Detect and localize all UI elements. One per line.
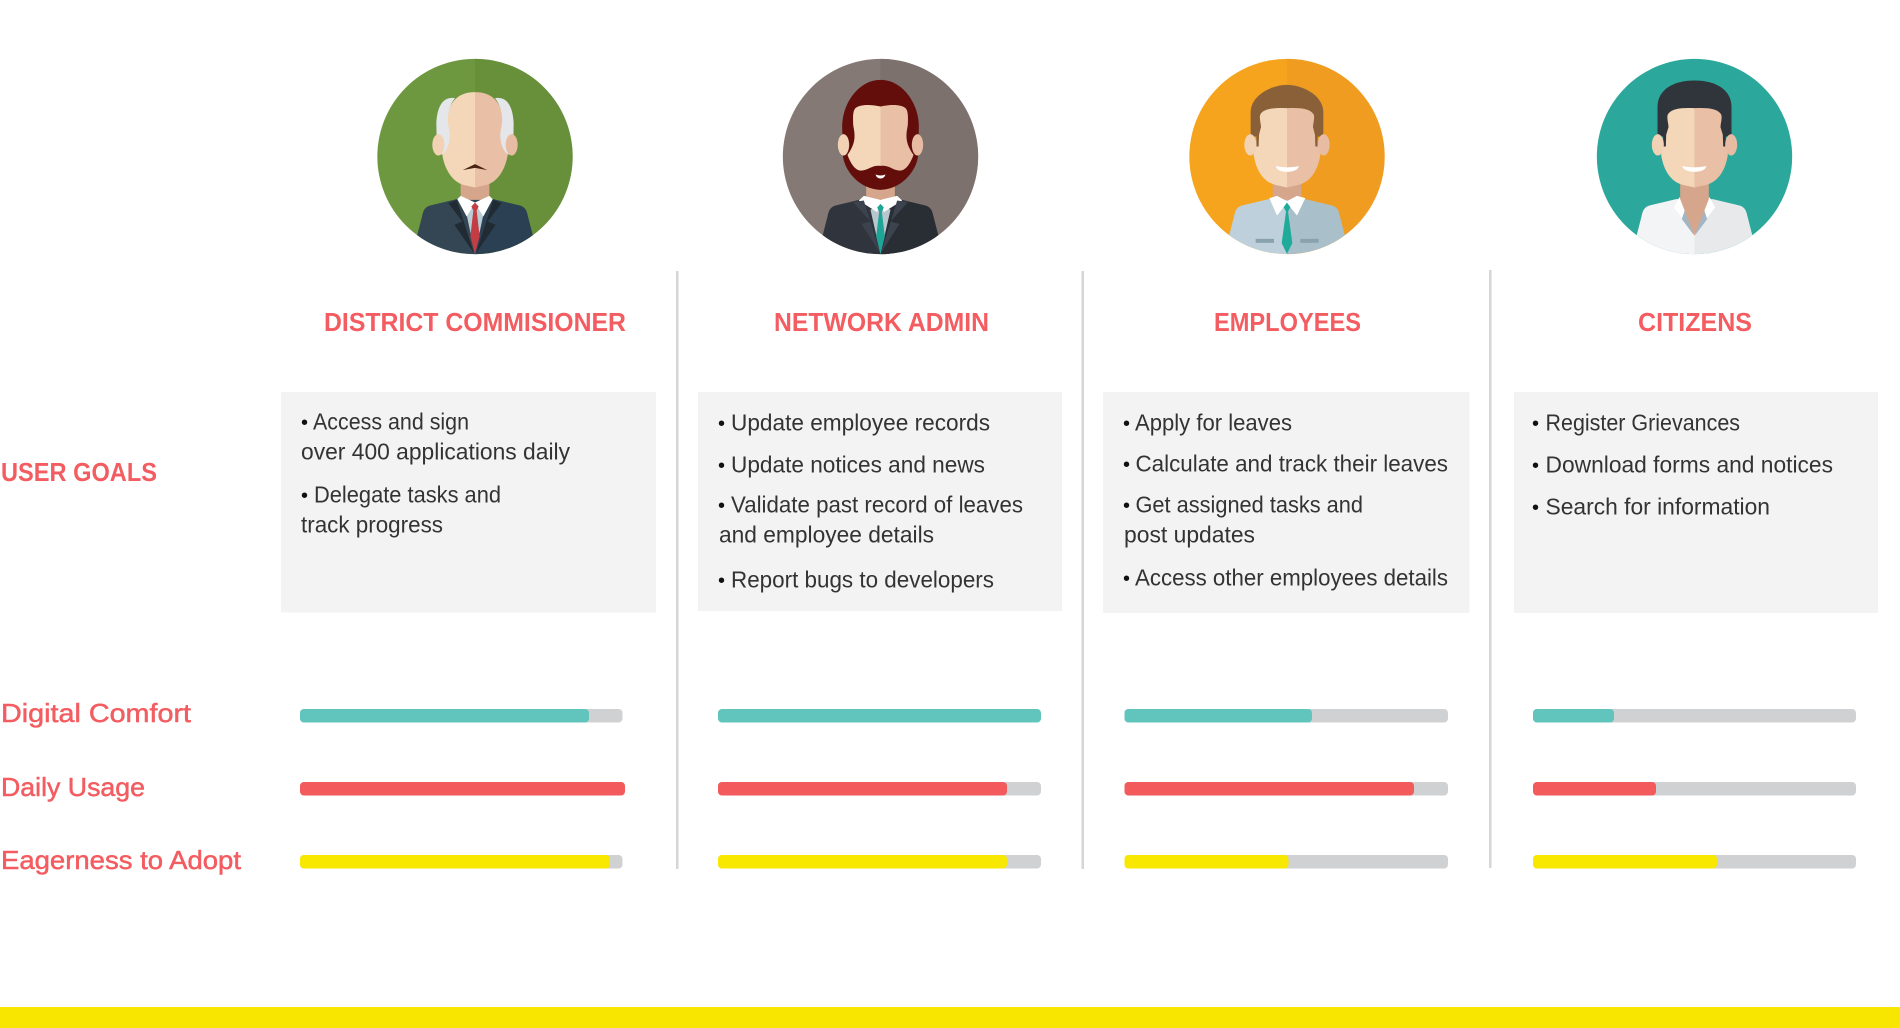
panel: district commisioner goals: track progress: [301, 512, 443, 538]
panel: district commisioner goals: Access and sign: [313, 408, 469, 434]
panel: network admin goals: and employee details: [719, 522, 934, 548]
row label: digital comfort: Digital Comfort: [1, 698, 192, 728]
dividers: [676, 270, 1492, 869]
row label: user goals: USER GOALS: [1, 457, 157, 487]
panel: citizens goals: •: [1532, 413, 1539, 435]
bar chart: network admin: [718, 709, 1041, 868]
panel: citizens goals: •: [1532, 497, 1539, 519]
panel: network admin goals: Validate past record of leaves: [731, 492, 1023, 518]
panel: network admin goals: •: [718, 413, 725, 435]
footer band: [0, 1007, 1900, 1028]
panel: employees goals: •: [1123, 568, 1130, 590]
panel: district commisioner goals: over 400 applications daily: [301, 438, 570, 464]
panel: employees goals: Apply for leaves: [1135, 410, 1292, 436]
panel: employees goals: Access other employees details: [1135, 564, 1448, 590]
panel: district commisioner goals: •: [301, 485, 308, 507]
panel: employees goals: Get assigned tasks and: [1136, 492, 1363, 518]
panel: citizens goals: Register Grievances: [1546, 410, 1740, 436]
bar chart: employees: [1124, 709, 1448, 868]
bar chart: citizens: [1533, 709, 1856, 868]
icon: avatar network admin: [783, 59, 978, 260]
panel: district commisioner goals: [281, 392, 656, 612]
row label: daily usage: Daily Usage: [1, 772, 145, 802]
icon: avatar district commissioner: [377, 59, 573, 260]
heading: citizens: CITIZENS: [1638, 307, 1752, 337]
panel: citizens goals: •: [1532, 455, 1539, 477]
heading: network admin: NETWORK ADMIN: [774, 307, 989, 337]
panel: network admin goals: •: [718, 455, 725, 477]
panel: employees goals: Calculate and track their leaves: [1136, 450, 1448, 476]
panel: employees goals: •: [1123, 495, 1130, 517]
panel: network admin goals: Update employee records: [731, 410, 990, 436]
panel: employees goals: •: [1123, 413, 1130, 435]
panel: citizens goals: Search for information: [1546, 494, 1770, 520]
panel: network admin goals: [698, 392, 1062, 611]
icon: avatar employee: [1189, 59, 1385, 260]
panel: employees goals: [1103, 392, 1470, 613]
panel: network admin goals: •: [718, 495, 725, 517]
bar chart: district commisioner: [300, 709, 625, 868]
icon: avatar citizen: [1597, 59, 1792, 260]
panel: network admin goals: Update notices and news: [731, 452, 985, 478]
panel: employees goals: post updates: [1124, 522, 1255, 548]
panel: citizens goals: [1514, 392, 1878, 613]
panel: network admin goals: Report bugs to developers: [731, 566, 994, 592]
panel: network admin goals: •: [718, 570, 725, 592]
heading: employees: EMPLOYEES: [1214, 307, 1361, 337]
heading: district commisioner: DISTRICT COMMISIONER: [324, 307, 626, 337]
panel: employees goals: •: [1123, 454, 1130, 476]
panel: citizens goals: Download forms and notices: [1546, 452, 1833, 478]
row label: eagerness to adopt: Eagerness to Adopt: [1, 845, 242, 875]
panel: district commisioner goals: Delegate tasks and: [314, 482, 501, 508]
panel: district commisioner goals: •: [301, 412, 308, 434]
